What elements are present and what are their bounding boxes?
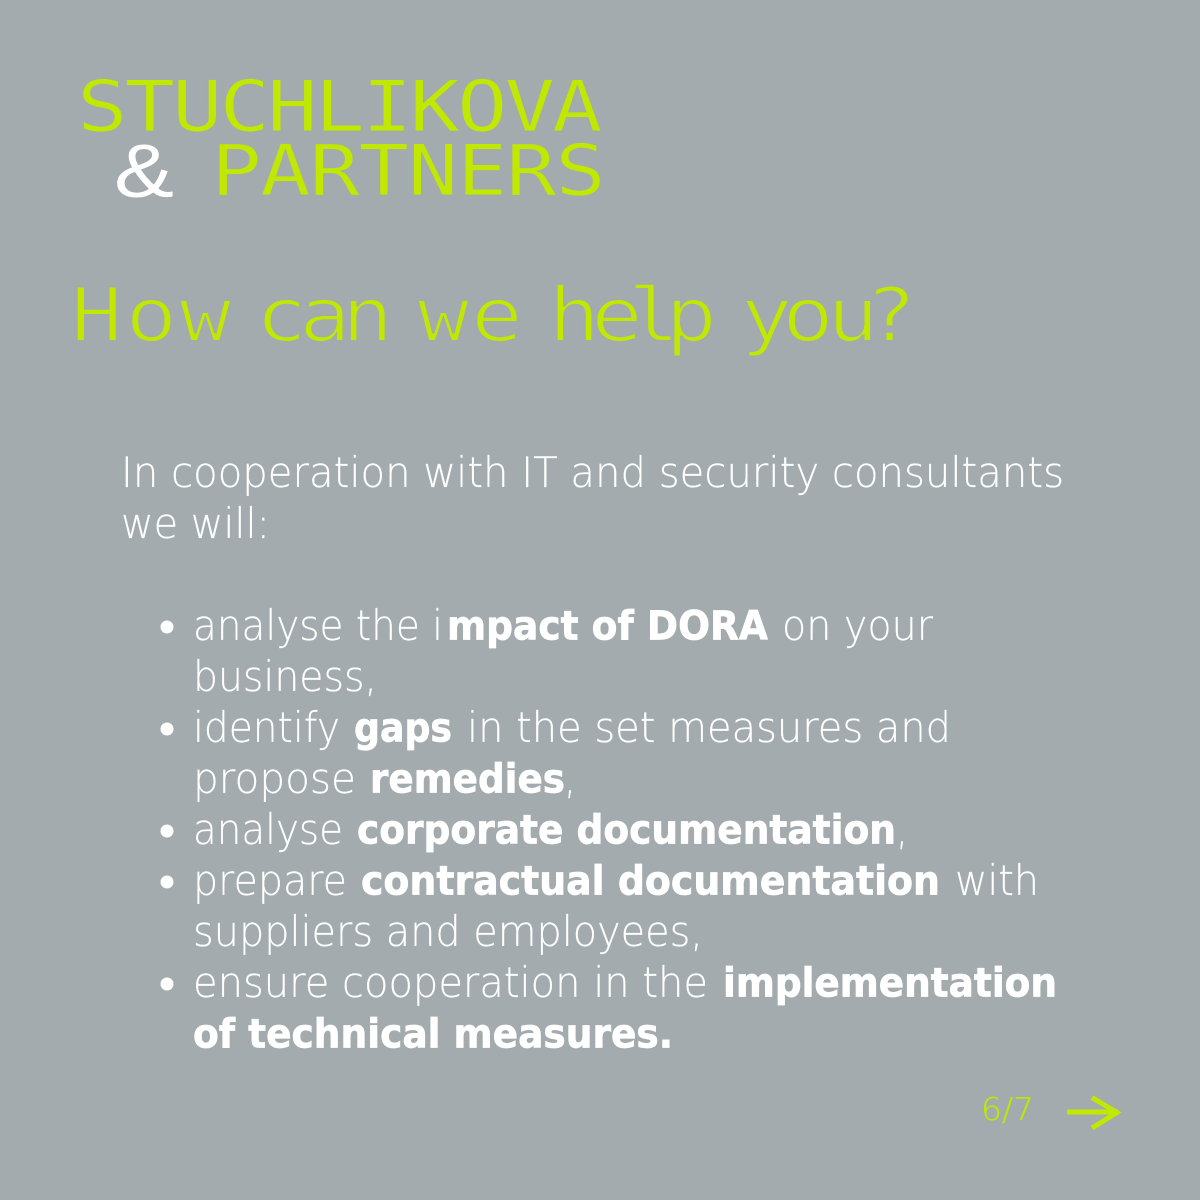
page number: 6/7 xyxy=(981,1092,1034,1128)
intro text: In cooperation with IT and security consultants xyxy=(121,448,1064,497)
list item: gaps and remedies: propose xyxy=(193,754,356,803)
bullet list xyxy=(160,601,1057,1058)
list item: contractual documentation: with xyxy=(955,856,1039,905)
list item: impact of DORA: on your xyxy=(782,601,934,650)
intro text: we will: xyxy=(121,499,270,548)
list item: contractual documentation: contractual documentation xyxy=(361,858,940,904)
list item: contractual documentation: prepare xyxy=(193,856,347,905)
list item: impact of DORA: analyse the i xyxy=(193,601,443,650)
list item: corporate documentation xyxy=(160,805,907,854)
list item: technical measures xyxy=(160,958,1057,1058)
list item: gaps and remedies: , xyxy=(565,754,575,803)
logo: Stuchlikova & Partners: PARTNERS xyxy=(211,131,606,212)
logo: Stuchlikova & Partners: STUCHLIKOVA xyxy=(77,67,603,148)
list item: gaps and remedies: in the set measures and xyxy=(467,703,951,752)
list item: corporate documentation: , xyxy=(897,805,907,854)
list item: gaps and remedies: remedies xyxy=(370,756,565,802)
arrow xyxy=(1067,1098,1118,1128)
list item: contractual documentation: suppliers and employees, xyxy=(193,907,703,956)
list item: contractual documentation xyxy=(160,856,1039,956)
list item: corporate documentation: analyse xyxy=(193,805,343,854)
list item: gaps and remedies xyxy=(160,703,951,803)
intro text xyxy=(121,448,1064,548)
logo: Stuchlikova & Partners xyxy=(77,67,606,213)
list item: corporate documentation: corporate documentation xyxy=(357,808,896,854)
logo: Stuchlikova & Partners: & xyxy=(114,129,174,213)
list item: technical measures: of technical measures. xyxy=(193,1012,673,1058)
list item: gaps and remedies: gaps xyxy=(354,706,452,752)
list item: gaps and remedies: identify xyxy=(193,703,340,752)
list item: impact of DORA: business, xyxy=(193,652,377,701)
list item: technical measures: implementation xyxy=(723,960,1057,1006)
list item: impact of DORA: mpact of DORA xyxy=(447,604,768,650)
heading: How can we help you? xyxy=(71,272,917,360)
list item: impact of DORA xyxy=(160,601,934,701)
list item: technical measures: ensure cooperation in the xyxy=(193,958,708,1007)
